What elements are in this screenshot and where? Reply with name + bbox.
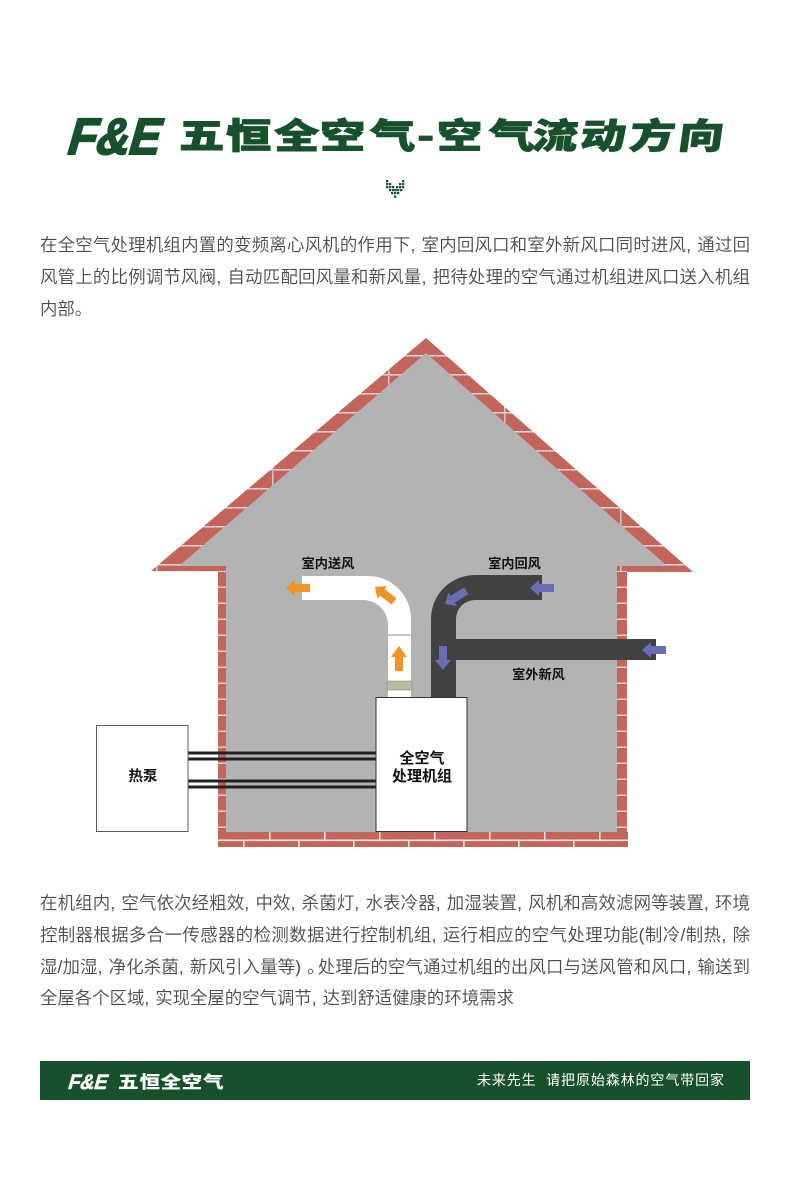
process paragraph: 控制器根据多合一传感器的检测数据进行控制机组, 运行相应的空气处理功能(制冷/制热, 除 <box>40 925 750 945</box>
title: brand F&E: F&E <box>62 109 170 165</box>
refrigerant pipes <box>188 753 376 787</box>
process paragraph: 在机组内, 空气依次经粗效, 中效, 杀菌灯, 水表冷器, 加湿装置, 风机和高效滤网等装置, 环境 <box>40 893 750 913</box>
process paragraph: 湿/加湿, 净化杀菌, 新风引入量等) 。处理后的空气通过机组的出风口与送风管和风口, 输送到 <box>40 957 750 977</box>
arrow: supply bend <box>370 581 399 608</box>
label: heat pump: 热泵 <box>128 768 158 785</box>
right wall <box>617 571 627 833</box>
intro paragraph: 在全空气处理机组内置的变频离心风机的作用下, 室内回风口和室外新风口同时进风, 通过回 <box>40 235 750 255</box>
process paragraph <box>40 893 750 1008</box>
process paragraph: 全屋各个区域, 实现全屋的空气调节, 达到舒适健康的环境需求 <box>40 988 514 1008</box>
bottom wall <box>218 832 628 847</box>
intro paragraph: 内部。 <box>40 299 92 319</box>
intro paragraph <box>40 235 750 319</box>
label: indoor supply: 室内送风 <box>302 555 354 571</box>
arrow: return inlet <box>530 580 554 596</box>
title: product name: 五恒全空气-空气 <box>179 108 534 159</box>
return and fresh air duct (dark) <box>431 575 656 697</box>
footer slogan: 未来先生 请把原始森林的空气带回家 <box>477 1072 724 1088</box>
label: air handling unit: 处理机组 <box>392 767 452 785</box>
title <box>62 108 728 165</box>
left wall <box>218 571 226 833</box>
icon: dotted V ornament <box>386 180 404 198</box>
heat pump box <box>96 726 188 832</box>
footer brand <box>66 1069 224 1094</box>
supply duct (white) <box>302 576 412 697</box>
footer bar <box>40 1061 750 1100</box>
arrow: supply outlet <box>286 580 310 596</box>
arrow: fresh air inlet <box>642 642 666 658</box>
label: indoor return: 室内回风 <box>488 555 541 571</box>
air handling unit box <box>376 698 467 832</box>
arrow: down to unit <box>435 646 451 670</box>
house airflow diagram <box>96 338 693 847</box>
label: air handling unit: 全空气 <box>399 749 445 767</box>
roof brick band <box>151 338 693 572</box>
arrow: return bend <box>441 584 470 611</box>
arrow: supply upward <box>391 646 407 671</box>
damper <box>387 681 412 690</box>
footer brand: F&E <box>66 1070 111 1094</box>
house interior <box>179 353 667 832</box>
footer brand: 五恒全空气 <box>118 1069 224 1093</box>
label: outdoor fresh air: 室外新风 <box>512 666 565 682</box>
title: slanted topic: 流动方向 <box>530 108 728 159</box>
intro paragraph: 风管上的比例调节风阀, 自动匹配回风量和新风量, 把待处理的空气通过机组进风口送入机组 <box>40 267 750 287</box>
